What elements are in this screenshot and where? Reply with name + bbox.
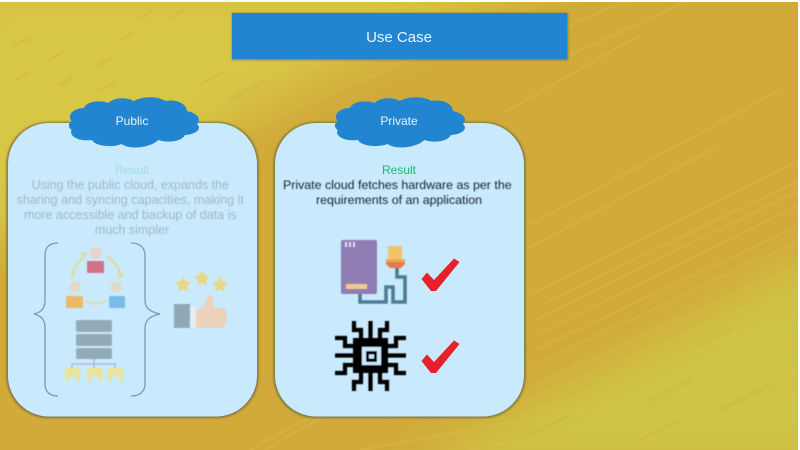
title banner [232,13,568,60]
public result heading: Result [115,163,150,177]
icon: microchip [335,321,406,391]
panel: private [274,97,526,418]
private cloud label: Private [380,114,418,128]
left brace [34,243,58,396]
public cloud label [69,97,199,147]
icon: red check mark [422,340,460,373]
icon: external hard drive [341,240,405,302]
private description: Private cloud fetches hardware as per the [283,178,512,192]
right brace [131,243,160,396]
icon: server network [65,320,123,381]
title banner: Use Case [366,29,432,46]
icon: thumbs up with stars [174,270,228,328]
private cloud label [335,97,465,147]
public description: much simpler [95,223,169,237]
public description: more accessible and backup of data is [24,208,237,222]
public description: Using the public cloud, expands the [32,178,229,192]
icon: red check mark [422,258,460,291]
public cloud label: Public [116,114,148,128]
icon: file sharing cycle [66,247,125,308]
private description: requirements of an application [316,193,482,207]
public description: sharing and syncing capacities, making it [17,193,244,207]
panel: public [6,97,258,418]
private result heading: Result [382,163,417,177]
